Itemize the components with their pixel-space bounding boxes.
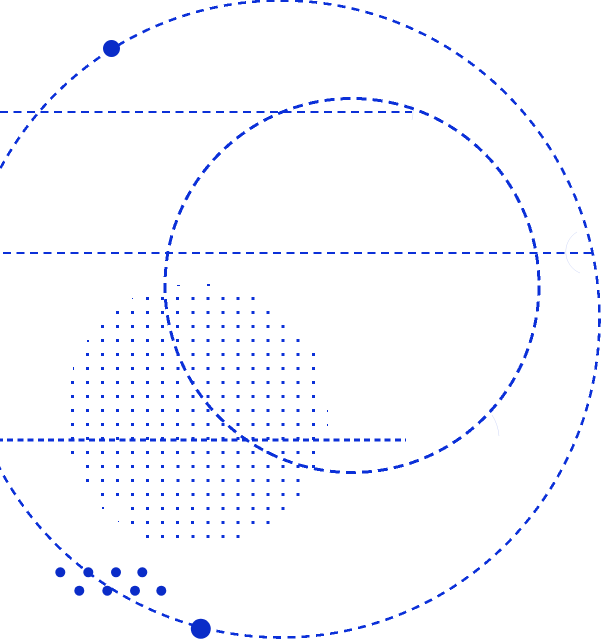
small dot cluster <box>55 567 166 596</box>
faint arcs <box>412 105 580 436</box>
inner dashed circle <box>165 98 539 472</box>
large marker dot: bottom <box>191 619 211 639</box>
dashed line: bottom <box>0 438 406 442</box>
dot grid <box>71 284 328 536</box>
dashed line: top <box>0 111 412 113</box>
large marker dot: top <box>103 40 120 57</box>
dashed line: middle <box>0 252 595 254</box>
